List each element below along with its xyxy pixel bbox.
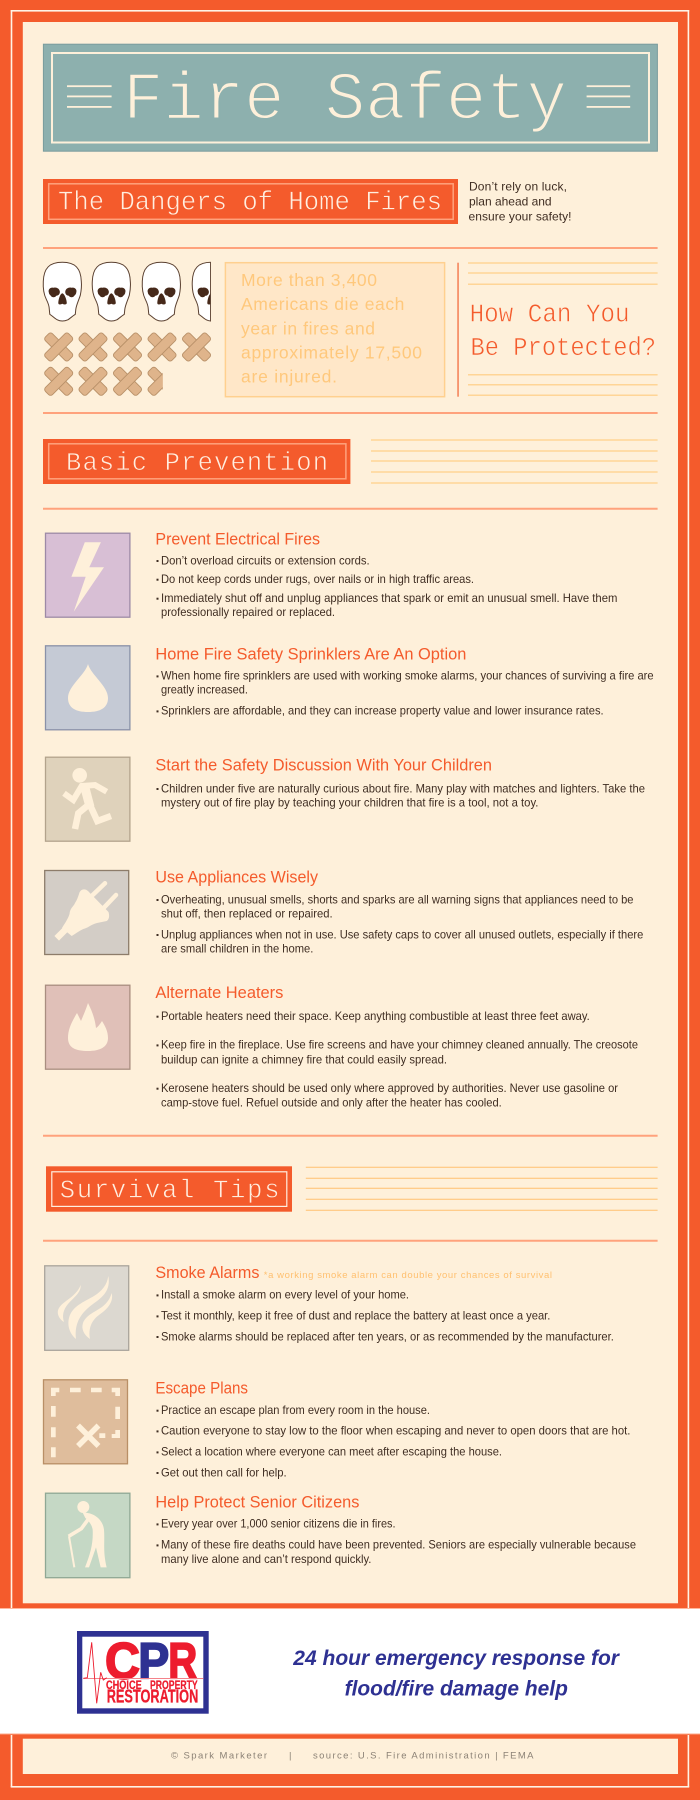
- item: Prevent Electrical Fires: [46, 530, 617, 619]
- item: Prevent Electrical Fires: Immediately shut off and unplug appliances that spark or emit an unusual smell. Have them: [161, 591, 617, 605]
- section heading: Basic Prevention: [43, 439, 350, 484]
- logo: CPR Choice Property Restoration: RESTORATION: [107, 1686, 198, 1706]
- item: Home Fire Safety Sprinklers: Sprinklers are affordable, and they can increase property value and lower insurance rates.: [161, 704, 604, 718]
- item: Use Appliances Wisely: [45, 869, 644, 956]
- item: Smoke Alarms: Install a smoke alarm on every level of your home.: [161, 1288, 409, 1302]
- item: Home Fire Safety Sprinklers: When home fire sprinklers are used with working smoke alarms, your chances of surviving a fire are: [161, 669, 654, 683]
- icon: smoke: [45, 1266, 129, 1350]
- item: Use Appliances Wisely: shut off, then replaced or repaired.: [161, 907, 333, 921]
- item: Prevent Electrical Fires: Don’t overload circuits or extension cords.: [161, 553, 370, 567]
- section heading: Basic Prevention: Basic Prevention: [66, 449, 328, 478]
- slogan: [292, 1647, 621, 1701]
- stat callout: More than 3,400: [241, 270, 377, 290]
- logo: CPR Choice Property Restoration: P: [138, 1632, 169, 1689]
- section heading: Survival Tips: Survival Tips: [60, 1176, 279, 1205]
- item: Use Appliances Wisely: are small children in the home.: [161, 942, 313, 956]
- item: Start the Safety Discussion: Start the Safety Discussion With Your Children: [155, 756, 492, 774]
- item: Help Protect Senior Citizens: many live alone and can’t respond quickly.: [161, 1552, 371, 1566]
- item: Escape Plans: Practice an escape plan from every room in the house.: [161, 1403, 430, 1417]
- note: smoke alarm tip: *a working smoke alarm can double your chances of survival: [264, 1270, 552, 1281]
- stat callout: [225, 263, 445, 397]
- item: Escape Plans: Get out then call for help.: [161, 1465, 287, 1479]
- footer credits: © Spark Marketer: [171, 1751, 267, 1762]
- item: Help Protect Senior Citizens: Help Protect Senior Citizens: [155, 1493, 359, 1511]
- item: Alternate Heaters: Alternate Heaters: [155, 984, 283, 1002]
- icon: flame: [46, 985, 130, 1069]
- item: Use Appliances Wisely: Unplug appliances when not in use. Use safety caps to cover all unused outlets, especially if there: [161, 927, 644, 941]
- heading: How Can You Be Protected?: [468, 263, 658, 395]
- section heading: The Dangers of Home Fires: The Dangers of Home Fires: [58, 187, 442, 217]
- section heading: Survival Tips: [46, 1166, 292, 1212]
- footer credits: |: [289, 1751, 291, 1762]
- item: Alternate Heaters: Keep fire in the fireplace. Use fire screens and have your chimney cleaned annually. The creosote: [161, 1038, 638, 1052]
- item: Smoke Alarms: [45, 1264, 614, 1350]
- icon: water drop: [46, 646, 130, 730]
- item: Escape Plans: Select a location where everyone can meet after escaping the house.: [161, 1445, 502, 1459]
- slogan: flood/fire damage help: [345, 1678, 568, 1701]
- item: Alternate Heaters: [46, 984, 638, 1110]
- item: Escape Plans: Escape Plans: [155, 1379, 248, 1397]
- stat callout: year in fires and: [241, 318, 375, 338]
- item: Start the Safety Discussion: mystery out of fire play by teaching your children that fire is a tool, not a toy.: [161, 796, 538, 810]
- item: Home Fire Safety Sprinklers: [46, 646, 654, 730]
- logo: CPR Choice Property Restoration: C: [105, 1632, 140, 1689]
- item: Help Protect Senior Citizens: [46, 1493, 636, 1578]
- footer credits: [171, 1751, 534, 1762]
- icon: electric plug: [45, 870, 129, 954]
- icons: bandages for injuries: [43, 332, 212, 397]
- item: Smoke Alarms: Test it monthly, keep it free of dust and replace the battery at least once a year.: [161, 1309, 550, 1323]
- stat callout: approximately 17,500: [241, 342, 422, 362]
- icon: senior with cane: [46, 1493, 130, 1578]
- logo: CPR Choice Property Restoration: R: [168, 1632, 197, 1689]
- item: Escape Plans: Caution everyone to stay low to the floor when escaping and never to open doors that are hot.: [161, 1424, 630, 1438]
- icons: skulls for deaths: [43, 262, 230, 322]
- item: Smoke Alarms: Smoke Alarms: [155, 1264, 259, 1282]
- item: Help Protect Senior Citizens: Many of these fire deaths could have been prevented. Seniors are especially vulnerable because: [161, 1538, 636, 1552]
- item: Start the Safety Discussion: Children under five are naturally curious about fire. Many play with matches and lighters. Take the: [161, 781, 645, 795]
- item: Help Protect Senior Citizens: Every year over 1,000 senior citizens die in fires.: [161, 1517, 396, 1531]
- item: Alternate Heaters: Portable heaters need their space. Keep anything combustible at least three feet away.: [161, 1009, 590, 1023]
- tagline text: ensure your safety!: [468, 210, 572, 224]
- section heading: The Dangers of Home Fires: [43, 179, 458, 224]
- item: Prevent Electrical Fires: Prevent Electrical Fires: [155, 530, 320, 548]
- stat callout: Americans die each: [241, 294, 404, 314]
- item: Home Fire Safety Sprinklers: greatly increased.: [161, 683, 248, 697]
- slogan: 24 hour emergency response for: [292, 1647, 621, 1670]
- item: Alternate Heaters: buildup can ignite a chimney fire that could easily spread.: [161, 1052, 447, 1066]
- tagline text: plan ahead and: [469, 195, 552, 209]
- item: Use Appliances Wisely: Use Appliances Wisely: [155, 869, 319, 887]
- item: Start the Safety Discussion: [46, 756, 645, 841]
- item: Alternate Heaters: Kerosene heaters should be used only where approved by authorities. Never use gasoline or: [161, 1081, 618, 1095]
- item: Smoke Alarms: Smoke alarms should be replaced after ten years, or as recommended by the manufacturer.: [161, 1329, 614, 1343]
- tagline text: [468, 180, 572, 224]
- tagline text: Don’t rely on luck,: [469, 180, 567, 194]
- item: Escape Plans: [44, 1379, 630, 1479]
- title banner: Fire Safety: [123, 62, 567, 139]
- item: Alternate Heaters: camp-stove fuel. Refuel outside and only after the heater has cooled.: [161, 1096, 502, 1110]
- icon: lightning bolt: [46, 533, 130, 617]
- icon: running child: [46, 757, 130, 841]
- logo: CPR Choice Property Restoration: PROPERTY: [150, 1680, 198, 1692]
- item: Use Appliances Wisely: Overheating, unusual smells, shorts and sparks are all warning signs that appliances need to be: [161, 892, 634, 906]
- item: Prevent Electrical Fires: Do not keep cords under rugs, over nails or in high traffic areas.: [161, 572, 474, 586]
- icon: escape route: [44, 1380, 128, 1464]
- logo: CPR Choice Property Restoration: CHOICE: [106, 1680, 142, 1692]
- heading: How Can You Be Protected?: How Can You: [470, 301, 630, 330]
- heading: How Can You Be Protected?: Be Protected?: [470, 334, 656, 363]
- item: Prevent Electrical Fires: professionally repaired or replaced.: [161, 605, 335, 619]
- footer credits: source: U.S. Fire Administration | FEMA: [313, 1751, 534, 1762]
- logo: CPR Choice Property Restoration: [77, 1631, 209, 1714]
- title banner: [43, 44, 657, 151]
- item: Home Fire Safety Sprinklers: Home Fire Safety Sprinklers Are An Option: [155, 646, 466, 664]
- stat callout: are injured.: [241, 366, 337, 386]
